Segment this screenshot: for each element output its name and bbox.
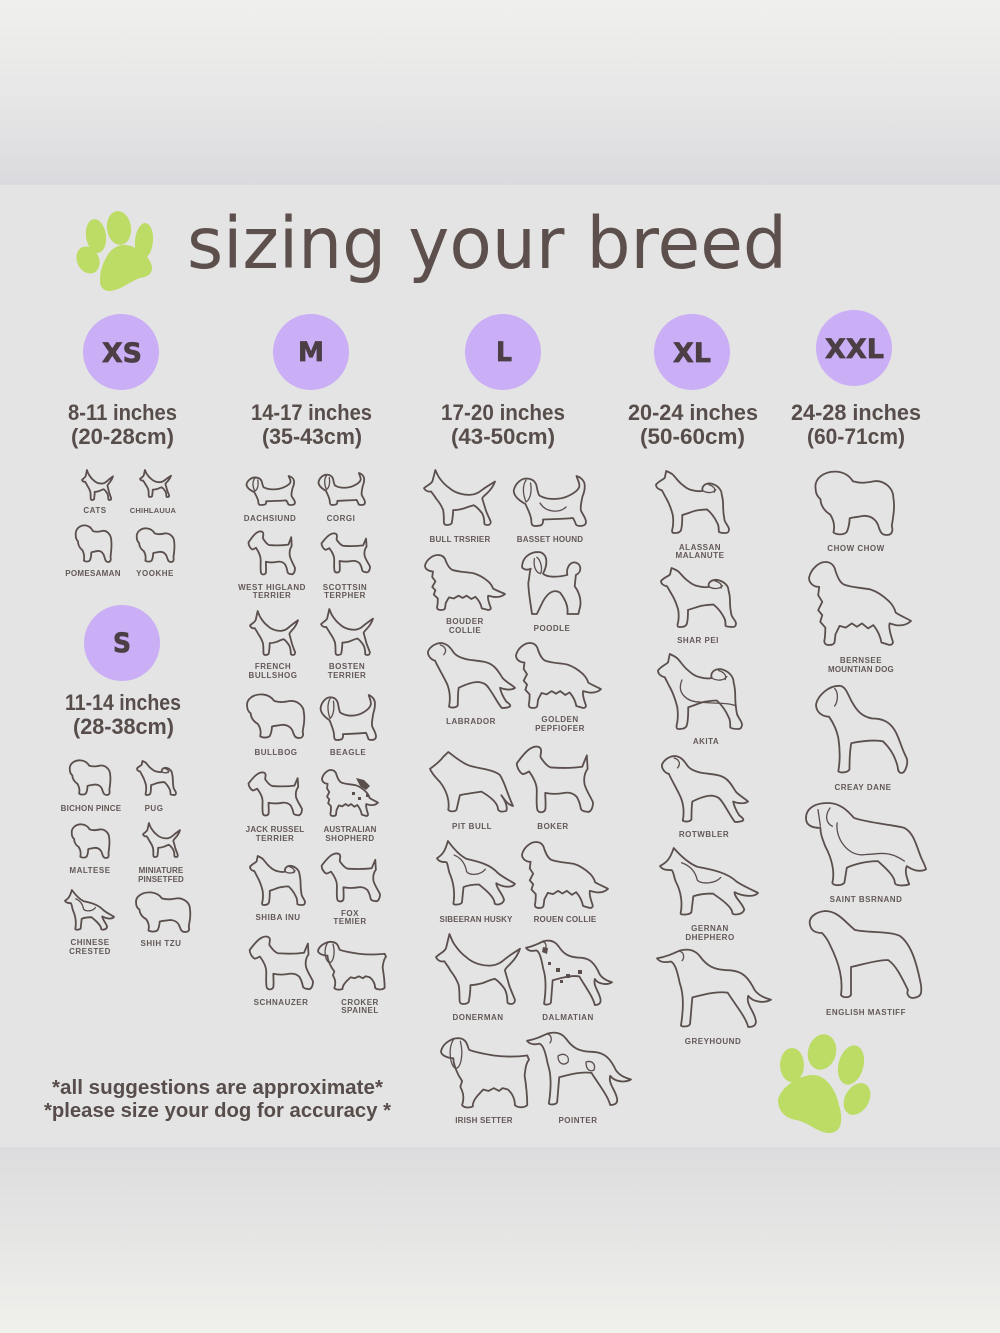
dog: dalmatian: DALMATIAN [542, 1013, 594, 1022]
dog: greyhound: GREYHOUND [685, 1037, 741, 1046]
dog: chow chow [815, 472, 894, 553]
dog: schnauzer [250, 936, 313, 1007]
dog: shih tzu: SHIH TZU [141, 939, 181, 948]
column: L [424, 314, 631, 1125]
dog: border collie [425, 555, 505, 635]
dog: rottweiler: ROTWBLER [679, 830, 729, 839]
footer note: *all suggestions are approximate* [52, 1077, 383, 1099]
badge: L: L [496, 337, 512, 368]
dog: irish setter [441, 1038, 529, 1125]
footer note [44, 1077, 391, 1122]
dog: golden retriever: PEPFIOFER [535, 724, 585, 733]
dog: dalmatian [526, 941, 612, 1022]
dog: rough collie: ROUEN COLLIE [534, 915, 597, 924]
badge: XS: XS [102, 338, 142, 369]
dog: pit bull [430, 752, 513, 831]
column: XS [65, 314, 177, 578]
dog: bull terrier [424, 470, 495, 544]
dog: dachshund [244, 476, 296, 523]
size range: M: (35-43cm) [262, 424, 362, 449]
badge: L [465, 314, 541, 390]
dog: australian shepherd [322, 770, 378, 843]
dog: rottweiler [662, 756, 748, 839]
dog: siberian husky [437, 841, 515, 924]
size range: M: 14-17 inches [251, 400, 372, 425]
dog: labrador: LABRADOR [446, 717, 496, 726]
dog: maltese: MALTESE [69, 866, 111, 875]
badge: XXL: XXL [825, 334, 884, 365]
dog: english mastiff: ENGLISH MASTIFF [826, 1008, 906, 1017]
dog: fox terrier: TEMIER [333, 917, 367, 926]
column: M [238, 314, 386, 1015]
dog: bull terrier: BULL TRSRIER [430, 535, 490, 544]
dog: alaskan malamute: ALASSAN [679, 543, 721, 552]
badge: XL: XL [673, 338, 711, 369]
dog: jack russell [246, 772, 304, 843]
dog: bulldog: BULLBOG [254, 748, 298, 757]
size range: XS [68, 400, 177, 449]
dog: shiba inu [250, 856, 305, 922]
badge: S: S [113, 628, 131, 659]
dog: boxer: BOKER [537, 822, 569, 831]
icon: green paw bottom right [778, 1031, 876, 1133]
dog: schnauzer: SCHNAUZER [254, 998, 308, 1007]
dog: boxer [517, 747, 593, 831]
dog: corgi [318, 473, 365, 523]
dog: german shepherd [660, 848, 758, 942]
size range: L [441, 400, 565, 449]
dog: pomeranian: POMESAMAN [65, 569, 121, 578]
background: blurred bottom band [0, 1147, 1000, 1333]
dog: pomeranian [65, 525, 121, 578]
dog: english mastiff [810, 911, 921, 1017]
dog: chinese crested [65, 890, 114, 956]
badge: S [84, 605, 160, 681]
column: XL [628, 314, 771, 1046]
dog: alaskan malamute: MALANUTE [676, 551, 725, 560]
dog: miniature pinscher: PINSETFED [138, 875, 184, 884]
dog: french bulldog [249, 611, 298, 680]
dog: irish setter: IRISH SETTER [455, 1116, 513, 1125]
dog: shar pei [661, 568, 736, 645]
column: XXL [791, 310, 926, 1017]
dog: basset hound [514, 476, 586, 544]
size range: S: 11-14 inches [65, 690, 181, 715]
dog: boston terrier [321, 609, 373, 680]
size range: S [65, 690, 181, 739]
dog: pit bull: PIT BULL [452, 822, 492, 831]
column: S [61, 605, 190, 956]
dog: fox terrier: FOX [341, 909, 359, 918]
dog: boston terrier: BOSTEN [329, 662, 365, 671]
dog: cocker spaniel: SPAINEL [341, 1006, 379, 1015]
dog: jack russell: TERRIER [256, 834, 294, 843]
dog: border collie: BOUDER [446, 617, 484, 626]
size range: XL: 20-24 inches [628, 400, 758, 425]
dog: shih tzu [136, 892, 190, 948]
badge: XXL [816, 310, 892, 386]
dog: saint bernard: SAINT BSRNAND [830, 895, 902, 904]
dog: fox terrier [322, 853, 380, 926]
dog: rough collie [522, 842, 608, 924]
dog: bernese mountain dog [809, 562, 911, 674]
dog: french bulldog: FRENCH [255, 662, 291, 671]
dog: greyhound [657, 950, 771, 1046]
title: sizing your breed [187, 202, 787, 285]
dog: bernese mountain dog: MOUNTIAN DOG [828, 665, 894, 674]
dog: bichon: BICHON PINCE [61, 804, 122, 813]
dog: scottish terrier: TERPHER [324, 591, 366, 600]
dog: scottish terrier: SCOTTSIN [323, 583, 367, 592]
footer note: *please size your dog for accuracy * [44, 1100, 391, 1122]
dog: cocker spaniel: CROKER [341, 998, 379, 1007]
background: blurred top band [0, 0, 1000, 185]
dog: yorkie [136, 528, 175, 578]
dog: chinese crested: CRESTED [69, 947, 111, 956]
dog: corgi: CORGI [327, 514, 355, 523]
dog: chihuahua: CHIHLAUUA [130, 506, 177, 515]
badge: M: M [298, 337, 324, 368]
size range: XL: (50-60cm) [640, 424, 745, 449]
dog: pointer: POINTER [558, 1116, 598, 1125]
dog: miniature pinscher: MINIATURE [139, 866, 184, 875]
dog: scottish terrier [321, 533, 370, 600]
dog: bichon [61, 760, 122, 813]
badge: XL [654, 314, 730, 390]
dog: shar pei: SHAR PEI [677, 636, 719, 645]
size range: XL [628, 400, 758, 449]
dog: golden retriever: GOLDEN [541, 715, 579, 724]
size range: S: (28-38cm) [73, 714, 174, 739]
dog: bernese mountain dog: BERNSEE [840, 656, 882, 665]
dog: german shepherd: GERNAN [691, 924, 729, 933]
icon: green paw top left [72, 209, 155, 291]
dog: shiba inu: SHIBA INU [255, 913, 301, 922]
size range: XXL: 24-28 inches [791, 400, 921, 425]
dog: alaskan malamute [656, 471, 729, 560]
dog: pointer [527, 1033, 631, 1125]
dog: jack russell: JACK RUSSEL [246, 825, 304, 834]
dog: yorkie: YOOKHE [136, 569, 174, 578]
size range: XXL: (60-71cm) [807, 424, 905, 449]
dog: chow chow: CHOW CHOW [827, 544, 885, 553]
dog: border collie: COLLIE [449, 626, 481, 635]
dog: german shepherd: DHEPHERO [685, 933, 735, 942]
badge: M [273, 314, 349, 390]
dog: doberman [436, 934, 520, 1022]
badge: XS [83, 314, 159, 390]
size range: XS: 8-11 inches [68, 400, 177, 425]
dog: great dane: CREAY DANE [834, 783, 892, 792]
dog: akita [658, 654, 742, 746]
dog: dachshund: DACHSIUND [244, 514, 296, 523]
dog: australian shepherd: AUSTRALIAN [324, 825, 377, 834]
dog: cats: CATS [83, 506, 107, 515]
dog: french bulldog: BULLSHOG [249, 671, 297, 680]
dog: saint bernard [806, 803, 926, 904]
size range: L: (43-50cm) [451, 424, 555, 449]
dog: labrador [428, 643, 515, 726]
dog: cats [82, 470, 113, 515]
dog: akita: AKITA [693, 737, 719, 746]
dog: australian shepherd: SHOPHERD [325, 834, 375, 843]
dog: maltese [69, 824, 111, 875]
dog: pug [137, 761, 176, 813]
dog: pug: PUG [145, 804, 163, 813]
dog: west highland terrier: TERRIER [253, 591, 291, 600]
dog: basset hound: BASSET HOUND [517, 535, 583, 544]
size range: XS: (20-28cm) [71, 424, 174, 449]
dog: miniature pinscher [138, 823, 184, 884]
dog: cocker spaniel [318, 942, 386, 1015]
dog: doberman: DONERMAN [452, 1013, 504, 1022]
size range: XXL [791, 400, 921, 449]
dog: beagle [321, 695, 376, 757]
dog: siberian husky: SIBEERAN HUSKY [440, 915, 513, 924]
main panel [0, 185, 1000, 1147]
dog: golden retriever [516, 643, 601, 733]
dog: bulldog [247, 694, 304, 757]
dog: west highland terrier: WEST HIGLAND [238, 583, 306, 592]
dog: boston terrier: TERRIER [328, 671, 366, 680]
dog: west highland terrier [238, 531, 306, 600]
dog: poodle: POODLE [534, 624, 571, 633]
dog: great dane [816, 686, 907, 792]
dog: chinese crested: CHINESE [70, 938, 110, 947]
dog: chihuahua [130, 470, 177, 515]
dog: beagle: BEAGLE [330, 748, 366, 757]
size range: L: 17-20 inches [441, 400, 565, 425]
size range: M [251, 400, 372, 449]
dog: poodle [522, 552, 581, 633]
